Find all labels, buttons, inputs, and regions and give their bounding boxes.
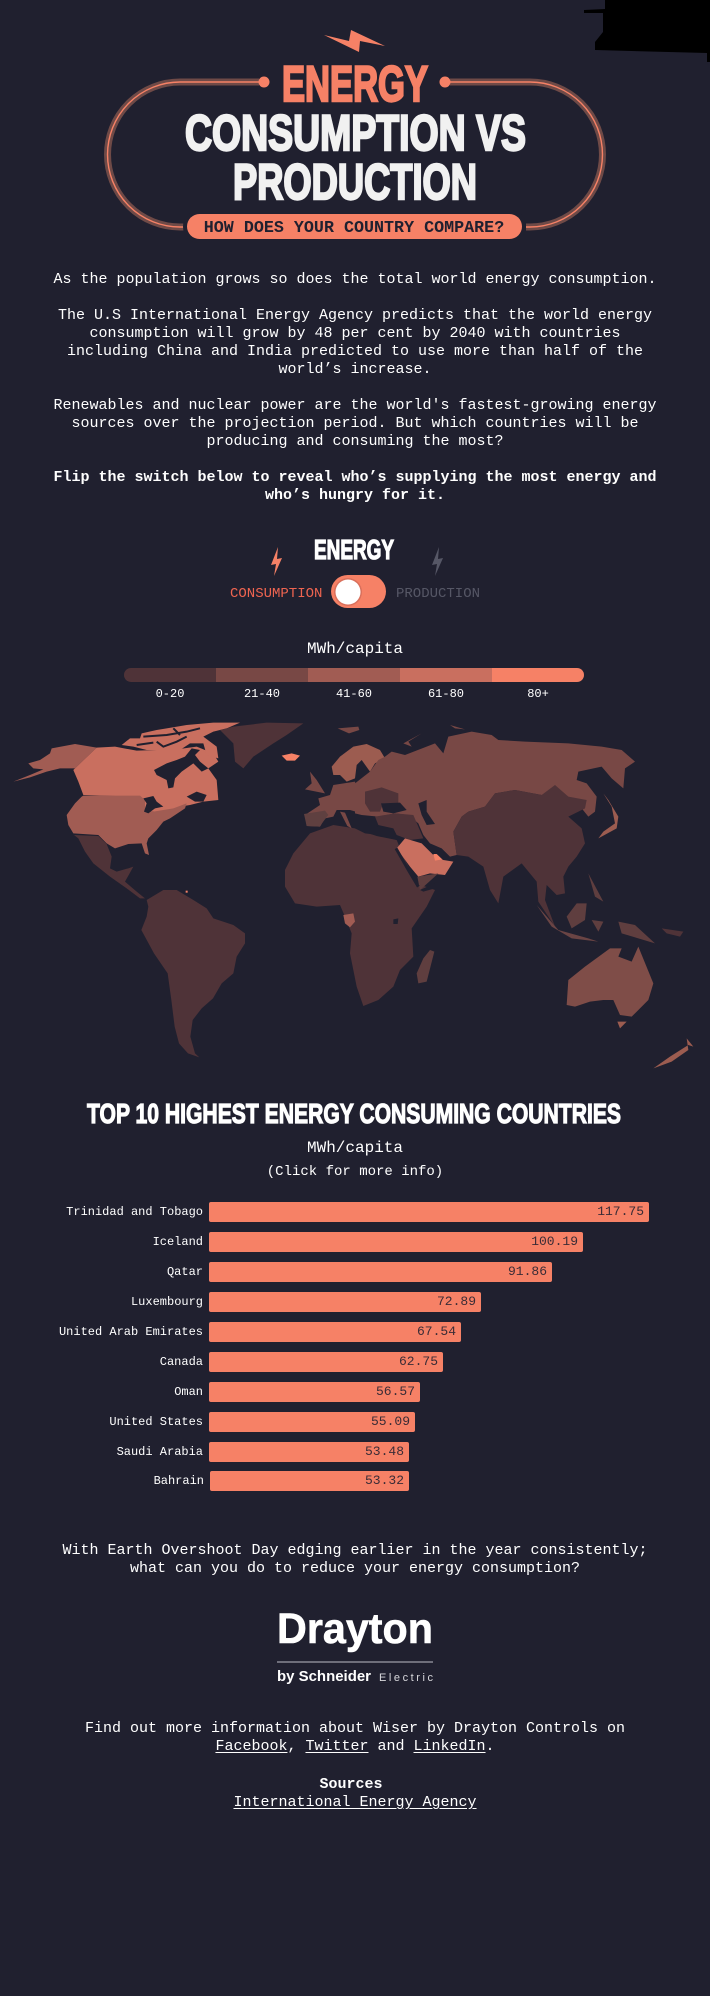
bar chart: 53.48 bbox=[365, 1444, 404, 1459]
sources heading: Sources bbox=[319, 1776, 382, 1793]
south america bbox=[141, 890, 245, 1057]
drayton logo bbox=[277, 1605, 434, 1685]
call to action: Flip the switch below to reveal who’s supplying the most energy and bbox=[53, 469, 657, 486]
toggle switch bbox=[331, 575, 386, 608]
australia bbox=[567, 947, 653, 1017]
subtitle pill bbox=[183, 210, 526, 243]
bar chart: 56.57 bbox=[376, 1384, 415, 1399]
tasmania bbox=[617, 1022, 627, 1028]
sulawesi bbox=[592, 920, 603, 932]
japan bbox=[598, 793, 618, 838]
iberia bbox=[304, 811, 328, 827]
colour scale legend: 21-40 bbox=[244, 687, 280, 701]
caspian sea bbox=[418, 800, 435, 825]
intro paragraph 2: world’s increase. bbox=[278, 361, 432, 378]
arctic islands bbox=[122, 723, 240, 758]
colour scale legend: 0-20 bbox=[156, 687, 184, 701]
drayton logo: by Schneider bbox=[277, 1669, 371, 1685]
colour scale legend: 41-60 bbox=[336, 687, 372, 701]
find out more text bbox=[85, 1720, 625, 1755]
title line: production: PRODUCTION bbox=[233, 154, 477, 210]
russia central asia bbox=[355, 732, 635, 857]
africa bbox=[285, 825, 435, 1006]
bar chart: Luxembourg bbox=[131, 1295, 203, 1309]
bar chart: Iceland bbox=[153, 1235, 203, 1249]
colour scale legend bbox=[124, 668, 584, 701]
call to action bbox=[53, 469, 657, 504]
title word: energy: ENERGY bbox=[282, 56, 428, 112]
icon: lightning bolt bbox=[324, 30, 385, 52]
title line: consumption vs: CONSUMPTION VS bbox=[185, 105, 526, 161]
bar chart: 72.89 bbox=[437, 1294, 476, 1309]
intro paragraph 2: consumption will grow by 48 per cent by 2040 with countries bbox=[89, 325, 621, 342]
drayton logo: Electric bbox=[379, 1672, 434, 1684]
find out more text: Find out more information about Wiser by Drayton Controls on bbox=[85, 1720, 625, 1737]
svalbard bbox=[338, 727, 359, 733]
closing question: what can you do to reduce your energy consumption? bbox=[130, 1560, 580, 1577]
western europe bbox=[305, 782, 362, 827]
closing question bbox=[62, 1542, 648, 1577]
chart hint: (Click for more info) bbox=[267, 1164, 443, 1180]
red sea bbox=[396, 848, 418, 887]
united states bbox=[67, 796, 187, 855]
header title badge bbox=[104, 30, 606, 239]
asia and oceania bbox=[355, 725, 693, 1068]
consumption label: CONSUMPTION bbox=[230, 586, 322, 602]
turkey iraq region bbox=[375, 813, 423, 840]
mediterranean east bbox=[355, 825, 397, 840]
novaya zemlya bbox=[403, 733, 422, 747]
greenland bbox=[220, 723, 303, 768]
scandinavia bbox=[332, 744, 385, 782]
china india south east asia bbox=[453, 785, 587, 927]
bar chart: Saudi Arabia bbox=[117, 1445, 203, 1459]
rounded frame right bbox=[440, 76, 602, 227]
rounded frame left bbox=[108, 76, 270, 227]
bar chart: Canada bbox=[160, 1355, 203, 1369]
philippines bbox=[588, 873, 603, 902]
st lawrence gulf bbox=[187, 792, 207, 802]
arctic channels bbox=[137, 728, 200, 747]
intro paragraph 1: As the population grows so does the total world energy consumption. bbox=[53, 271, 657, 288]
call to action: who’s hungry for it. bbox=[265, 487, 445, 504]
yemen bbox=[417, 873, 438, 890]
persian gulf bbox=[427, 843, 445, 854]
hudson bay bbox=[154, 748, 208, 788]
intro paragraph 2: The U.S International Energy Agency predicts that the world energy bbox=[58, 307, 652, 324]
colour scale legend: 80+ bbox=[527, 687, 549, 701]
alaska bbox=[13, 744, 97, 782]
energy toggle control bbox=[230, 534, 480, 608]
intro paragraph 2 bbox=[58, 307, 652, 378]
great lakes bbox=[143, 796, 163, 813]
production label: PRODUCTION bbox=[396, 586, 480, 602]
gabon bbox=[343, 913, 355, 927]
world map bbox=[14, 722, 694, 1068]
icon: consumption bolt bbox=[271, 547, 282, 576]
chart unit label: MWh/capita bbox=[307, 1139, 403, 1157]
gulf of aden bbox=[420, 882, 438, 892]
sumatra java bbox=[537, 905, 598, 942]
icon: production bolt bbox=[432, 547, 443, 576]
toggle heading: ENERGY bbox=[314, 534, 394, 565]
bar chart bbox=[59, 1202, 649, 1491]
uk bbox=[305, 772, 325, 793]
bar chart: United States bbox=[109, 1415, 203, 1429]
legend title: MWh/capita bbox=[307, 640, 403, 658]
italy bbox=[340, 812, 352, 828]
drayton logo: Drayton bbox=[277, 1605, 433, 1653]
bar chart: 53.32 bbox=[365, 1473, 404, 1488]
bar chart: 62.75 bbox=[399, 1354, 438, 1369]
black sea bbox=[381, 803, 407, 813]
borneo bbox=[567, 903, 587, 928]
redaction scribble top right bbox=[584, 0, 710, 62]
bar chart: Trinidad and Tobago bbox=[66, 1205, 203, 1219]
bar chart: 67.54 bbox=[417, 1324, 456, 1339]
bar chart: 100.19 bbox=[531, 1234, 578, 1249]
intro paragraph 3: producing and consuming the most? bbox=[206, 433, 504, 450]
bar chart: 117.75 bbox=[597, 1204, 644, 1219]
bar chart: Bahrain bbox=[154, 1474, 204, 1488]
intro paragraph 3 bbox=[53, 397, 657, 450]
bar chart: 91.86 bbox=[508, 1264, 547, 1279]
bar chart: United Arab Emirates bbox=[59, 1325, 203, 1339]
madagascar bbox=[417, 950, 434, 983]
bar chart: Oman bbox=[174, 1385, 203, 1399]
source link: International Energy Agency bbox=[233, 1794, 477, 1811]
lake victoria bbox=[393, 918, 398, 924]
find out more text: Facebook, Twitter and LinkedIn. bbox=[215, 1738, 495, 1755]
bar chart: 55.09 bbox=[371, 1414, 410, 1429]
intro paragraph 3: Renewables and nuclear power are the world's fastest-growing energy bbox=[53, 397, 657, 414]
bar chart: Qatar bbox=[167, 1265, 203, 1279]
eastern europe bbox=[365, 787, 398, 812]
iceland bbox=[282, 753, 300, 761]
arabian peninsula bbox=[397, 838, 453, 877]
canada mainland bbox=[73, 747, 218, 812]
new zealand bbox=[653, 1038, 693, 1068]
solomon islands bbox=[662, 928, 683, 937]
arctic russia islands bbox=[450, 725, 465, 729]
intro paragraph 2: including China and India predicted to use more than half of the bbox=[67, 343, 643, 360]
colour scale legend: 61-80 bbox=[428, 687, 464, 701]
new guinea bbox=[618, 922, 655, 943]
mexico central america bbox=[74, 835, 145, 898]
trinidad bbox=[186, 891, 188, 893]
closing question: With Earth Overshoot Day edging earlier in the year consistently; bbox=[62, 1542, 648, 1559]
qatar uae bbox=[433, 854, 442, 861]
subtitle pill: HOW DOES YOUR COUNTRY COMPARE? bbox=[204, 219, 504, 238]
intro paragraph 3: sources over the projection period. But which countries will be bbox=[71, 415, 639, 432]
